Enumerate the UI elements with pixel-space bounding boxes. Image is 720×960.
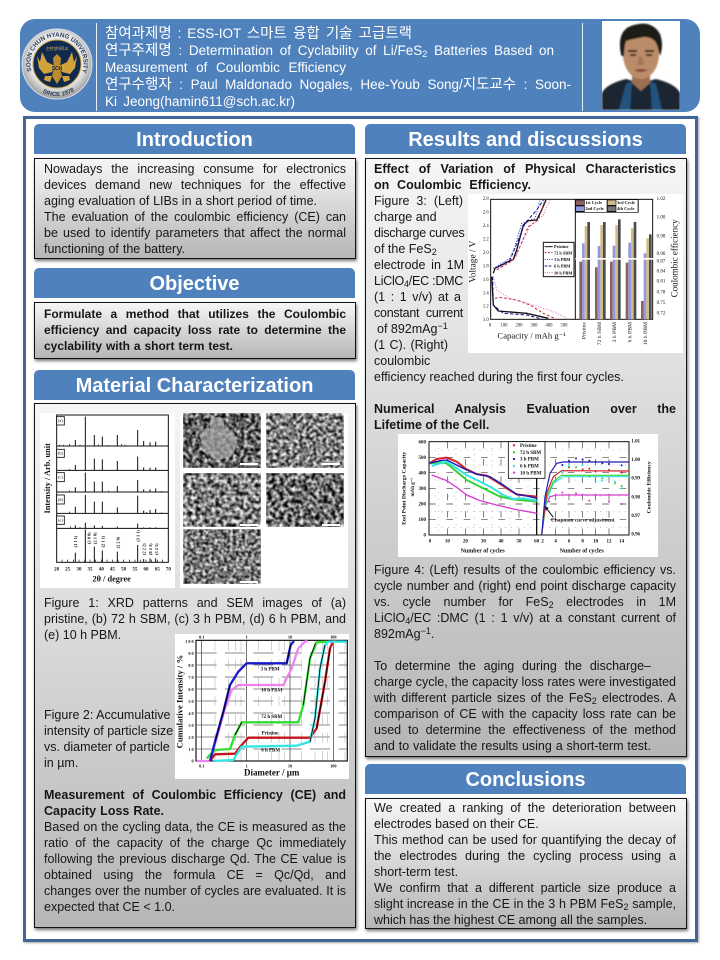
figure 1: XRD patterns chart: 55 bbox=[133, 567, 138, 572]
figure 2: cumulative intensity chart: 30 bbox=[188, 723, 195, 728]
figure 3: charge discharge curves and coulombic efficiency bars: 4th Cycle bbox=[617, 206, 635, 211]
figure 4: discharge capacity and coulombic efficiency chart: End Point Discharge Capacity bbox=[402, 452, 408, 525]
figure 3: charge discharge curves and coulombic efficiency bars: 2.4 bbox=[483, 224, 489, 229]
figure 2: cumulative intensity chart: 72 h SBM bbox=[261, 715, 282, 720]
figure 1: XRD patterns chart: (2 2 0) bbox=[115, 536, 120, 548]
numerical analysis heading: Numerical Analysis Evaluation over the bbox=[374, 402, 676, 416]
conclusions text: We created a ranking of the deterioration between bbox=[374, 801, 676, 815]
figure 4: discharge capacity and coulombic efficiency chart: 600 bbox=[419, 440, 426, 445]
figure 1: XRD patterns chart: (1 1 1) bbox=[73, 535, 78, 547]
figure 3 caption: (1 C). (Right) bbox=[374, 338, 448, 352]
measurement of coulombic efficiency text: obtained using the formula CE = Qc/Qd, and bbox=[44, 868, 346, 882]
figure 4: discharge capacity and coulombic efficiency chart: 2 bbox=[541, 540, 544, 545]
figure 3: charge discharge curves and coulombic efficiency bars: 0.78 bbox=[657, 291, 666, 296]
figure 2 caption: intensity of particle size bbox=[44, 724, 173, 738]
figure 3: charge discharge curves and coulombic efficiency bars: 72 h SBM bbox=[554, 250, 572, 255]
figure 4 caption: vs. cycle number for FeS2 electrodes in 1M bbox=[374, 595, 676, 610]
heading: conclusions: Conclusions bbox=[465, 769, 586, 791]
figure 3: charge discharge curves and coulombic efficiency bars: 3 h PBM bbox=[612, 322, 618, 342]
effect of variation heading bbox=[374, 162, 676, 192]
figure 3: charge discharge curves and coulombic efficiency bars: 0.81 bbox=[657, 280, 666, 285]
objective text box bbox=[34, 302, 356, 359]
conclusions text bbox=[374, 801, 676, 927]
figure 4: discharge capacity and coulombic efficiency chart: 12 bbox=[607, 540, 612, 545]
figure 4: discharge capacity and coulombic efficiency chart: 4 bbox=[554, 540, 557, 545]
figure 4: discharge capacity and coulombic efficiency chart: 40 bbox=[499, 540, 504, 545]
figure 1: XRD patterns chart: (d) bbox=[58, 497, 63, 502]
icon: university logo: SINCE 1978 bbox=[43, 88, 74, 96]
figure 4: discharge capacity and coulombic efficiency chart: 6 bbox=[568, 540, 571, 545]
figure 4: discharge capacity and coulombic efficiency chart: 10 h PBM bbox=[520, 471, 542, 476]
figure 2: cumulative intensity chart: 80 bbox=[188, 663, 195, 668]
figure 3: charge discharge curves and coulombic efficiency bars: 1.02 bbox=[657, 197, 666, 202]
figure 2: cumulative intensity chart: 20 bbox=[188, 735, 195, 740]
figure 2: cumulative intensity chart: 60 bbox=[188, 687, 195, 692]
header text: 참여과제명 : ESS-IOT 스마트 융합 기술 고급트랙 bbox=[105, 26, 412, 42]
results text box bbox=[365, 158, 687, 757]
figure 2: cumulative intensity chart: Pristine bbox=[262, 732, 279, 737]
aging paragraph: charge cycle, the capacity loss rates were investigated bbox=[374, 675, 676, 689]
figure 3 caption: LiClO4/EC :DMC bbox=[374, 274, 463, 289]
heading: material characterization: Material Characterization bbox=[76, 375, 313, 397]
figure 3: charge discharge curves and coulombic efficiency bars: Voltage / V bbox=[468, 240, 478, 283]
header text: 연구주제명 : Determination of Cyclability of Li/FeS2 Batteries Based on bbox=[105, 43, 554, 59]
figure 4: discharge capacity and coulombic efficiency chart: 60 bbox=[534, 540, 540, 545]
figure 3 caption: Figure 3: (Left) bbox=[374, 194, 463, 208]
figure 3: charge discharge curves and coulombic efficiency bars: 0.72 bbox=[657, 311, 666, 316]
figure 1: XRD patterns chart: 40 bbox=[99, 567, 104, 572]
figure 1: XRD patterns chart: (3 1 1) bbox=[136, 530, 141, 542]
figure 3 caption: of the FeS2 bbox=[374, 242, 437, 257]
effect of variation heading: on Coulombic Efficiency. bbox=[374, 178, 531, 192]
figure 4: discharge capacity and coulombic efficiency chart: Coulombic Efficiency bbox=[647, 461, 653, 513]
figure 2: cumulative intensity chart: 0.1 bbox=[199, 764, 204, 769]
icon: university logo bbox=[22, 28, 92, 100]
figure 3: charge discharge curves and coulombic efficiency bars: 1.00 bbox=[657, 215, 666, 220]
figure 1: XRD patterns chart: (3 2 1) bbox=[154, 543, 159, 555]
figure 1 caption bbox=[44, 596, 346, 642]
introduction text: devices demand new techniques for the effective bbox=[44, 178, 346, 192]
objective text bbox=[44, 307, 346, 353]
conclusions text: slight increase in the CE in the 3 h PBM FeS2 sample, bbox=[374, 897, 676, 912]
figure 4 caption bbox=[374, 563, 676, 641]
figure 1: SEM images bbox=[180, 413, 348, 588]
figure 3: charge discharge curves and coulombic efficiency bars: 10 h PBM bbox=[643, 322, 649, 345]
figure 4: discharge capacity and coulombic efficiency chart: Pristine bbox=[520, 444, 537, 449]
figure 4: discharge capacity and coulombic efficiency chart: 0 bbox=[429, 540, 432, 545]
figure 3: charge discharge curves and coulombic efficiency bars: 0.96 bbox=[657, 252, 666, 257]
figure 4 caption: Figure 4: (Left) results of the coulombic efficiency vs. bbox=[374, 563, 676, 577]
figure 2: cumulative intensity chart: 10 bbox=[288, 634, 292, 639]
figure 4: discharge capacity and coulombic efficiency chart: 14 bbox=[619, 540, 625, 545]
panel: conclusions bbox=[364, 764, 690, 934]
figure 4: discharge capacity and coulombic efficiency chart: 500 bbox=[419, 456, 426, 461]
figure 4: discharge capacity and coulombic efficiency chart: 0.97 bbox=[631, 514, 641, 519]
figure 4: discharge capacity and coulombic efficiency chart: 10 bbox=[593, 540, 599, 545]
figure 4: discharge capacity and coulombic efficiency chart: 100 bbox=[419, 518, 426, 523]
figure 3 caption bbox=[374, 194, 624, 384]
measurement of coulombic efficiency text: Measurement of Coulombic Efficiency (CE) and bbox=[44, 788, 346, 802]
figure 3 caption: constant current bbox=[374, 306, 463, 320]
heading: conclusions bbox=[365, 764, 686, 794]
figure 3: charge discharge curves and coulombic efficiency bars: 200 bbox=[516, 324, 523, 329]
figure 3 caption: discharge curves bbox=[374, 226, 464, 240]
figure 4: discharge capacity and coulombic efficiency chart: 20 bbox=[463, 540, 468, 545]
heading: objective bbox=[34, 268, 355, 298]
objective text: Formulate a method that utilizes the Coulombic bbox=[44, 307, 346, 321]
figure 1: XRD patterns chart: (c) bbox=[58, 475, 63, 480]
figure 2 caption: in µm. bbox=[44, 756, 78, 770]
introduction text: Nowadays the increasing consume for electronics bbox=[44, 162, 346, 176]
measurement of coulombic efficiency text: Capacity Loss Rate. bbox=[44, 804, 164, 818]
heading: results and discussions: Results and discussions bbox=[408, 129, 643, 151]
figure 1: XRD patterns chart: (0 2 3) bbox=[148, 543, 153, 555]
figure 4: discharge capacity and coulombic efficiency chart: 0 bbox=[423, 534, 426, 539]
figure 2: cumulative intensity chart: 100 bbox=[330, 764, 337, 769]
figure 4: discharge capacity and coulombic efficiency chart: 8 bbox=[581, 540, 584, 545]
figure 4: discharge capacity and coulombic efficiency chart: Number of cycles bbox=[461, 548, 505, 554]
figure 3 caption: coulombic bbox=[374, 354, 430, 368]
figure 1: XRD patterns chart: (e) bbox=[58, 518, 63, 523]
figure 3: charge discharge curves and coulombic efficiency bars: 72 h SBM bbox=[597, 322, 603, 345]
icon: university logo: SOON CHUN HYANG UNIVERSITY bbox=[26, 32, 88, 74]
figure 1: XRD patterns chart: 60 bbox=[144, 567, 149, 572]
figure 3: charge discharge curves and coulombic efficiency bars: 3rd Cycle bbox=[617, 200, 635, 205]
objective text: cyclability with a short term test. bbox=[44, 339, 233, 353]
figure 4: discharge capacity and coulombic efficiency chart: 6 h PBM bbox=[520, 465, 539, 470]
figure 3: charge discharge curves and coulombic efficiency bars: 2.6 bbox=[483, 210, 489, 215]
figure 3: charge discharge curves and coulombic efficiency bars: Pristine bbox=[581, 322, 587, 339]
panel: objective bbox=[32, 268, 360, 364]
measurement of coulombic efficiency text bbox=[44, 788, 346, 914]
figure 3 caption: charge and bbox=[374, 210, 437, 224]
figure 4: discharge capacity and coulombic efficiency chart: mAh g⁻¹ bbox=[410, 478, 416, 497]
figure 1: XRD patterns chart: 50 bbox=[121, 567, 127, 572]
header text: Ki Jeong(hamin611@sch.ac.kr) bbox=[105, 94, 295, 109]
measurement of coulombic efficiency text: expected that CE < 1.0. bbox=[44, 900, 175, 914]
conclusions text: This method can be used for quantifying the decay of bbox=[374, 833, 676, 847]
figure 3: charge discharge curves and coulombic efficiency bars: 1.6 bbox=[483, 278, 489, 283]
figure 3: charge discharge curves and coulombic efficiency bars: 3 h PBM bbox=[554, 257, 570, 262]
conclusions text: electrodes based on their CE. bbox=[374, 817, 539, 831]
measurement of coulombic efficiency text: following the previous discharge Qd. The CE value is bbox=[44, 852, 346, 866]
figure 3: charge discharge curves and coulombic efficiency bars: 100 bbox=[501, 324, 508, 329]
heading: objective: Objective bbox=[149, 273, 240, 295]
figure 4: discharge capacity and coulombic efficiency chart bbox=[398, 434, 658, 557]
figure 2: cumulative intensity chart: 1 bbox=[246, 764, 248, 769]
figure 1: XRD patterns chart: 20 bbox=[54, 567, 60, 572]
introduction text: be used to identify parameters that affect the normal bbox=[44, 226, 346, 240]
introduction text: functioning of the battery. bbox=[44, 242, 185, 256]
aging paragraph: comparison of CE with the capacity loss rate can be bbox=[374, 707, 676, 721]
figure 2: cumulative intensity chart: 10 bbox=[288, 764, 292, 769]
conclusions text: the electrodes during the cycling process using a bbox=[374, 849, 676, 863]
introduction text: aging evaluation of LIBs in a short period of time. bbox=[44, 194, 317, 208]
figure 1 caption: (e) 10 h PBM. bbox=[44, 628, 121, 642]
icon: university logo: SCH bbox=[52, 66, 63, 72]
heading: introduction bbox=[34, 124, 355, 154]
header text: Measurement of Coulombic Efficiency bbox=[105, 60, 346, 75]
introduction text: The evaluation of the coulombic efficiency (CE) can bbox=[44, 210, 346, 224]
figure 3: charge discharge curves and coulombic efficiency bars: 0.84 bbox=[657, 270, 666, 275]
panel: results and discussions bbox=[364, 124, 690, 762]
figure 2: cumulative intensity chart: 50 bbox=[188, 699, 195, 704]
header text bbox=[105, 26, 571, 109]
figure 1: XRD patterns chart: (2 1 1) bbox=[101, 535, 106, 547]
figure 4 caption: 892mAg−1. bbox=[374, 626, 434, 641]
figure 1: XRD patterns chart bbox=[40, 413, 175, 588]
figure 3: charge discharge curves and coulombic efficiency bars: 1.0 bbox=[483, 318, 489, 323]
portrait photo bbox=[602, 21, 680, 110]
right header divider bbox=[582, 23, 583, 111]
figure 2: cumulative intensity chart: 6 h PBM bbox=[261, 748, 280, 753]
figure 2 caption: vs. diameter of particle bbox=[44, 740, 170, 754]
heading: results and discussions bbox=[365, 124, 686, 154]
figure 1: XRD patterns chart: 45 bbox=[110, 567, 115, 572]
figure 1: XRD patterns chart: (2 1 0) bbox=[93, 532, 98, 544]
figure 4: discharge capacity and coulombic efficiency chart: 0.98 bbox=[631, 495, 641, 500]
heading: introduction: Introduction bbox=[136, 129, 253, 151]
header banner bbox=[20, 19, 700, 112]
figure 3: charge discharge curves and coulombic efficiency bars: 6 h PBM bbox=[628, 322, 634, 342]
figure 2: cumulative intensity chart: 0 bbox=[191, 759, 195, 764]
figure 3: charge discharge curves and coulombic efficiency bars: 1.8 bbox=[483, 265, 489, 270]
figure 1: XRD patterns chart: 35 bbox=[88, 567, 93, 572]
figure 3 caption: of 892mAg−1 bbox=[377, 321, 448, 336]
figure 2: cumulative intensity chart: 100 bbox=[185, 639, 195, 644]
figure 2: cumulative intensity chart: 100 bbox=[330, 634, 337, 639]
introduction text bbox=[44, 162, 346, 256]
figure 4: discharge capacity and coulombic efficiency chart: 30 bbox=[481, 540, 486, 545]
figure 3: charge discharge curves and coulombic efficiency bars: 1.2 bbox=[483, 305, 489, 310]
figure 3 caption: (1 : 1 v/v) at a bbox=[374, 290, 461, 304]
figure 1: XRD patterns chart: 65 bbox=[155, 567, 160, 572]
figure 4: discharge capacity and coulombic efficiency chart: 1.01 bbox=[631, 439, 641, 444]
figure 3: charge discharge curves and coulombic efficiency bars: 0.98 bbox=[657, 234, 666, 239]
figure 1: XRD patterns chart: (2 0 0) bbox=[86, 532, 91, 544]
figure 4 caption: LiClO4/EC :DMC (1 : 1 v/v) at a constant current of bbox=[374, 611, 676, 626]
figure 1: XRD patterns chart: 70 bbox=[166, 567, 171, 572]
aging paragraph: with different particle sizes of the FeS2 electrodes. A bbox=[374, 691, 676, 706]
numerical analysis heading: Lifetime of the Cell. bbox=[374, 418, 489, 432]
figure 2 caption bbox=[44, 708, 173, 770]
panel: material characterization bbox=[32, 370, 360, 932]
figure 1 caption: Figure 1: XRD patterns and SEM images of (a) bbox=[44, 596, 346, 610]
figure 3: charge discharge curves and coulombic efficiency bars: 0 bbox=[489, 324, 492, 329]
figure 1: XRD patterns chart: Intensity / Arb. unit bbox=[43, 443, 52, 514]
conclusions text: which has the highest CE among all the samples. bbox=[374, 913, 647, 927]
figure 3 caption: electrode in 1M bbox=[374, 258, 464, 272]
figure 2: cumulative intensity chart: 70 bbox=[188, 675, 195, 680]
figure 4: discharge capacity and coulombic efficiency chart: Number of cycles bbox=[560, 548, 604, 554]
figure 2: cumulative intensity chart: Diameter / µm bbox=[244, 768, 300, 778]
figure 1: XRD patterns chart: 25 bbox=[65, 567, 71, 572]
figure 3: charge discharge curves and coulombic efficiency bars: 2.8 bbox=[483, 197, 489, 202]
figure 4: discharge capacity and coulombic efficiency chart: 200 bbox=[419, 503, 426, 508]
figure 3: charge discharge curves and coulombic efficiency bars: 2.0 bbox=[483, 251, 489, 256]
heading: material characterization bbox=[34, 370, 355, 400]
figure 3: charge discharge curves and coulombic efficiency bars: 2nd Cycle bbox=[585, 206, 604, 211]
figure 4: discharge capacity and coulombic efficiency chart: 72 h SBM bbox=[520, 451, 541, 456]
figure 2: cumulative intensity chart: 1 bbox=[246, 634, 248, 639]
figure 4: discharge capacity and coulombic efficiency chart: 50 bbox=[517, 540, 522, 545]
figure 2: cumulative intensity chart: 90 bbox=[188, 651, 195, 656]
figure 3: charge discharge curves and coulombic efficiency bars: Pristine bbox=[554, 244, 569, 249]
icon: university logo: 순천향대학교 bbox=[46, 45, 68, 51]
material characterization text box bbox=[34, 403, 356, 928]
measurement of coulombic efficiency text: changes over the number of cycles are evaluated. It is bbox=[44, 884, 346, 898]
figure 3: charge discharge curves and coulombic efficiency bars: 2.2 bbox=[483, 237, 489, 242]
figure 1: XRD patterns chart: (a) bbox=[58, 418, 63, 423]
figure 1 caption: pristine, (b) 72 h SBM, (c) 3 h PBM, (d) 6 h PBM, and bbox=[44, 612, 346, 626]
aging paragraph bbox=[374, 659, 676, 753]
introduction text box bbox=[34, 158, 356, 259]
figure 4: discharge capacity and coulombic efficiency chart: 300 bbox=[419, 487, 426, 492]
figure 2: cumulative intensity chart bbox=[175, 634, 349, 779]
effect of variation heading: Effect of Variation of Physical Characteristics bbox=[374, 162, 676, 176]
figure 2: cumulative intensity chart: 10 bbox=[188, 747, 195, 752]
figure 2 caption: Figure 2: Accumulative bbox=[44, 708, 170, 722]
figure 3: charge discharge curves and coulombic efficiency bars: 1.4 bbox=[483, 291, 489, 296]
objective text: efficiency and capacity loss rate to determine the bbox=[44, 323, 346, 337]
figure 1: XRD patterns chart: (b) bbox=[58, 451, 63, 456]
figure 2: cumulative intensity chart: 3 h PBM bbox=[261, 667, 280, 672]
figure 3: charge discharge curves and coulombic efficiency bars: 400 bbox=[546, 324, 553, 329]
aging paragraph: To determine the aging during the discharge– bbox=[374, 659, 651, 673]
figure 3: charge discharge curves and coulombic efficiency bars: Capacity / mAh g⁻¹ bbox=[497, 330, 566, 340]
figure 3: charge discharge curves and coulombic efficiency bars: 500 bbox=[561, 324, 568, 329]
figure 3: charge discharge curves and coulombic efficiency bars bbox=[468, 194, 683, 353]
conclusions text: We confirm that a different particle size produce a bbox=[374, 881, 676, 895]
figure 4: discharge capacity and coulombic efficiency chart: 0.96 bbox=[631, 533, 641, 538]
numerical analysis heading bbox=[374, 402, 676, 432]
figure 3: charge discharge curves and coulombic efficiency bars: 1st Cycle bbox=[585, 200, 602, 205]
measurement of coulombic efficiency text: ratio of the capacity of the charge Qc immediately bbox=[44, 836, 346, 850]
figure 2: cumulative intensity chart: 10 h PBM bbox=[261, 688, 283, 693]
left header divider bbox=[96, 23, 97, 111]
figure 1: XRD patterns chart: 2θ / degree bbox=[92, 575, 131, 584]
figure 3: charge discharge curves and coulombic efficiency bars: 10 h PBM bbox=[554, 270, 573, 275]
conclusions text: short-term test. bbox=[374, 865, 458, 879]
figure 3: charge discharge curves and coulombic efficiency bars: 6 h PBM bbox=[554, 264, 570, 269]
figure 4: discharge capacity and coulombic efficiency chart: 0.99 bbox=[631, 476, 641, 481]
figure 3 caption: efficiency reached during the first four cycles. bbox=[374, 370, 624, 384]
figure 2: cumulative intensity chart: 40 bbox=[188, 711, 195, 716]
figure 4: discharge capacity and coulombic efficiency chart: Chapman curve adjustment bbox=[551, 518, 615, 524]
header text: 연구수행자 : Paul Maldonado Nogales, Hee-Youb Song/지도교수 : Soon- bbox=[105, 77, 571, 93]
figure 3: charge discharge curves and coulombic efficiency bars: 0.75 bbox=[657, 301, 666, 306]
figure 4: discharge capacity and coulombic efficiency chart: 1.00 bbox=[631, 458, 641, 463]
aging paragraph: and to validate the results using a short-term test. bbox=[374, 739, 651, 753]
figure 1: XRD patterns chart: (2 2 2) bbox=[142, 543, 147, 555]
figure 4: discharge capacity and coulombic efficiency chart: 3 h PBM bbox=[520, 458, 539, 463]
figure 3: charge discharge curves and coulombic efficiency bars: Coulombic efficiency bbox=[669, 219, 679, 297]
measurement of coulombic efficiency text: Based on the cycling data, the CE is measured as the bbox=[44, 820, 346, 834]
figure 2: cumulative intensity chart: 0.1 bbox=[199, 634, 204, 639]
figure 3: charge discharge curves and coulombic efficiency bars: 0.87 bbox=[657, 259, 666, 264]
figure 3: charge discharge curves and coulombic efficiency bars: 300 bbox=[531, 324, 538, 329]
panel: introduction bbox=[32, 124, 360, 264]
conclusions text box bbox=[365, 798, 687, 929]
figure 1: XRD patterns chart: 30 bbox=[77, 567, 82, 572]
figure 4: discharge capacity and coulombic efficiency chart: 10 bbox=[445, 540, 450, 545]
figure 4: discharge capacity and coulombic efficiency chart: 400 bbox=[419, 471, 426, 476]
aging paragraph: used to determine the effectiveness of the method bbox=[374, 723, 676, 737]
figure 4 caption: cycle number and (right) end point discharge capacity bbox=[374, 579, 676, 593]
